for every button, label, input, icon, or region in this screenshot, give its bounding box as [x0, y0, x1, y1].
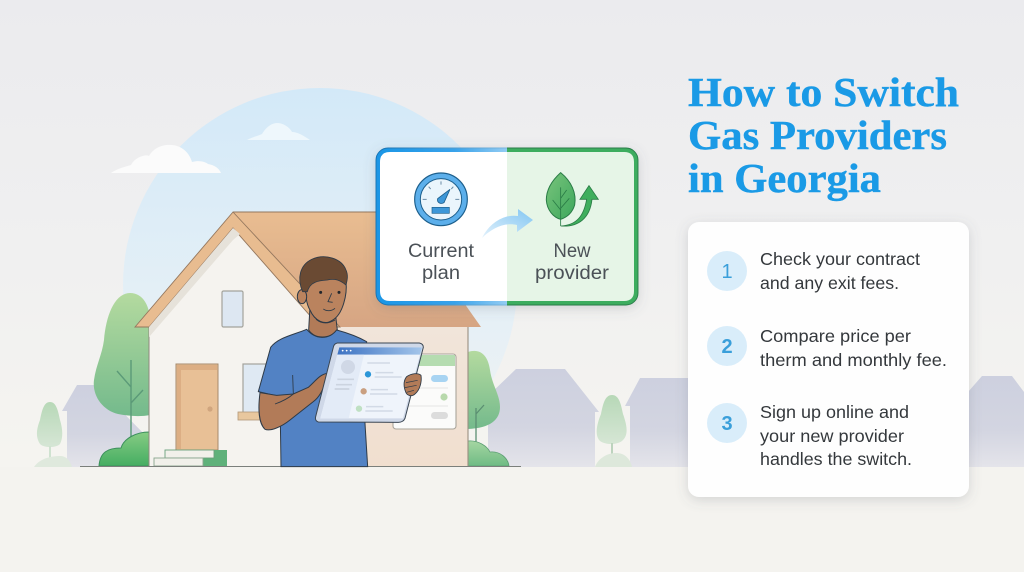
eyes and mouth [316, 291, 340, 323]
card right side [507, 152, 634, 301]
step 1: 1 [721, 261, 733, 283]
background tree left [34, 402, 72, 467]
main roof [233, 212, 481, 327]
shrub: right of house [468, 441, 509, 466]
step 3: your new provider [760, 426, 904, 446]
label: current plan: Current [408, 241, 475, 262]
step 1: Check your contract [760, 249, 920, 269]
background tree right [595, 395, 632, 467]
label: current plan [408, 241, 475, 284]
neck [309, 307, 337, 337]
step 3: 3 [721, 413, 733, 435]
house walls [149, 228, 320, 466]
gable roof edge [135, 212, 340, 327]
step 2: 2 [721, 336, 733, 358]
background houses [62, 369, 1024, 467]
step 3: Sign up online and [760, 402, 909, 422]
person with tablet [258, 257, 423, 467]
right hand [404, 374, 421, 396]
sky circle [123, 88, 516, 380]
tree: right of house [468, 351, 500, 442]
front steps [154, 450, 227, 466]
house [135, 212, 481, 466]
hair [300, 257, 347, 292]
panel: steps [688, 222, 969, 497]
label: current plan: plan [422, 263, 460, 284]
step 3 [707, 402, 912, 469]
label: new provider [535, 241, 610, 284]
tablet [315, 343, 423, 422]
tree: left of house [94, 293, 150, 440]
step 2 [707, 326, 947, 370]
step 1 [707, 249, 920, 293]
step 2: Compare price per [760, 326, 911, 346]
title: Gas Providers [688, 112, 947, 158]
shrub: left of house [99, 432, 149, 466]
title [688, 69, 959, 201]
door [176, 364, 218, 450]
face [305, 275, 346, 322]
label: new provider: New [554, 241, 591, 262]
cloud: large [111, 145, 221, 173]
icon: gauge [415, 173, 467, 226]
label: new provider: provider [535, 263, 610, 284]
front window [238, 364, 270, 420]
card left side [380, 152, 507, 301]
small attic window [222, 291, 243, 327]
step 3: handles the switch. [760, 449, 912, 469]
ground [0, 467, 1024, 572]
shirt [258, 329, 368, 467]
title: in Georgia [688, 155, 881, 201]
icon: leaf with arrow [546, 173, 598, 226]
card frame [376, 148, 638, 305]
comparison card [376, 148, 638, 305]
ear [297, 290, 307, 304]
wall panel [393, 354, 456, 429]
title: How to Switch [688, 69, 959, 115]
ground line [80, 466, 521, 468]
step 2: therm and monthly fee. [760, 350, 947, 370]
arrow: current to new [482, 209, 533, 238]
cloud: small [247, 123, 310, 140]
step 1: and any exit fees. [760, 273, 899, 293]
arm [259, 373, 327, 430]
